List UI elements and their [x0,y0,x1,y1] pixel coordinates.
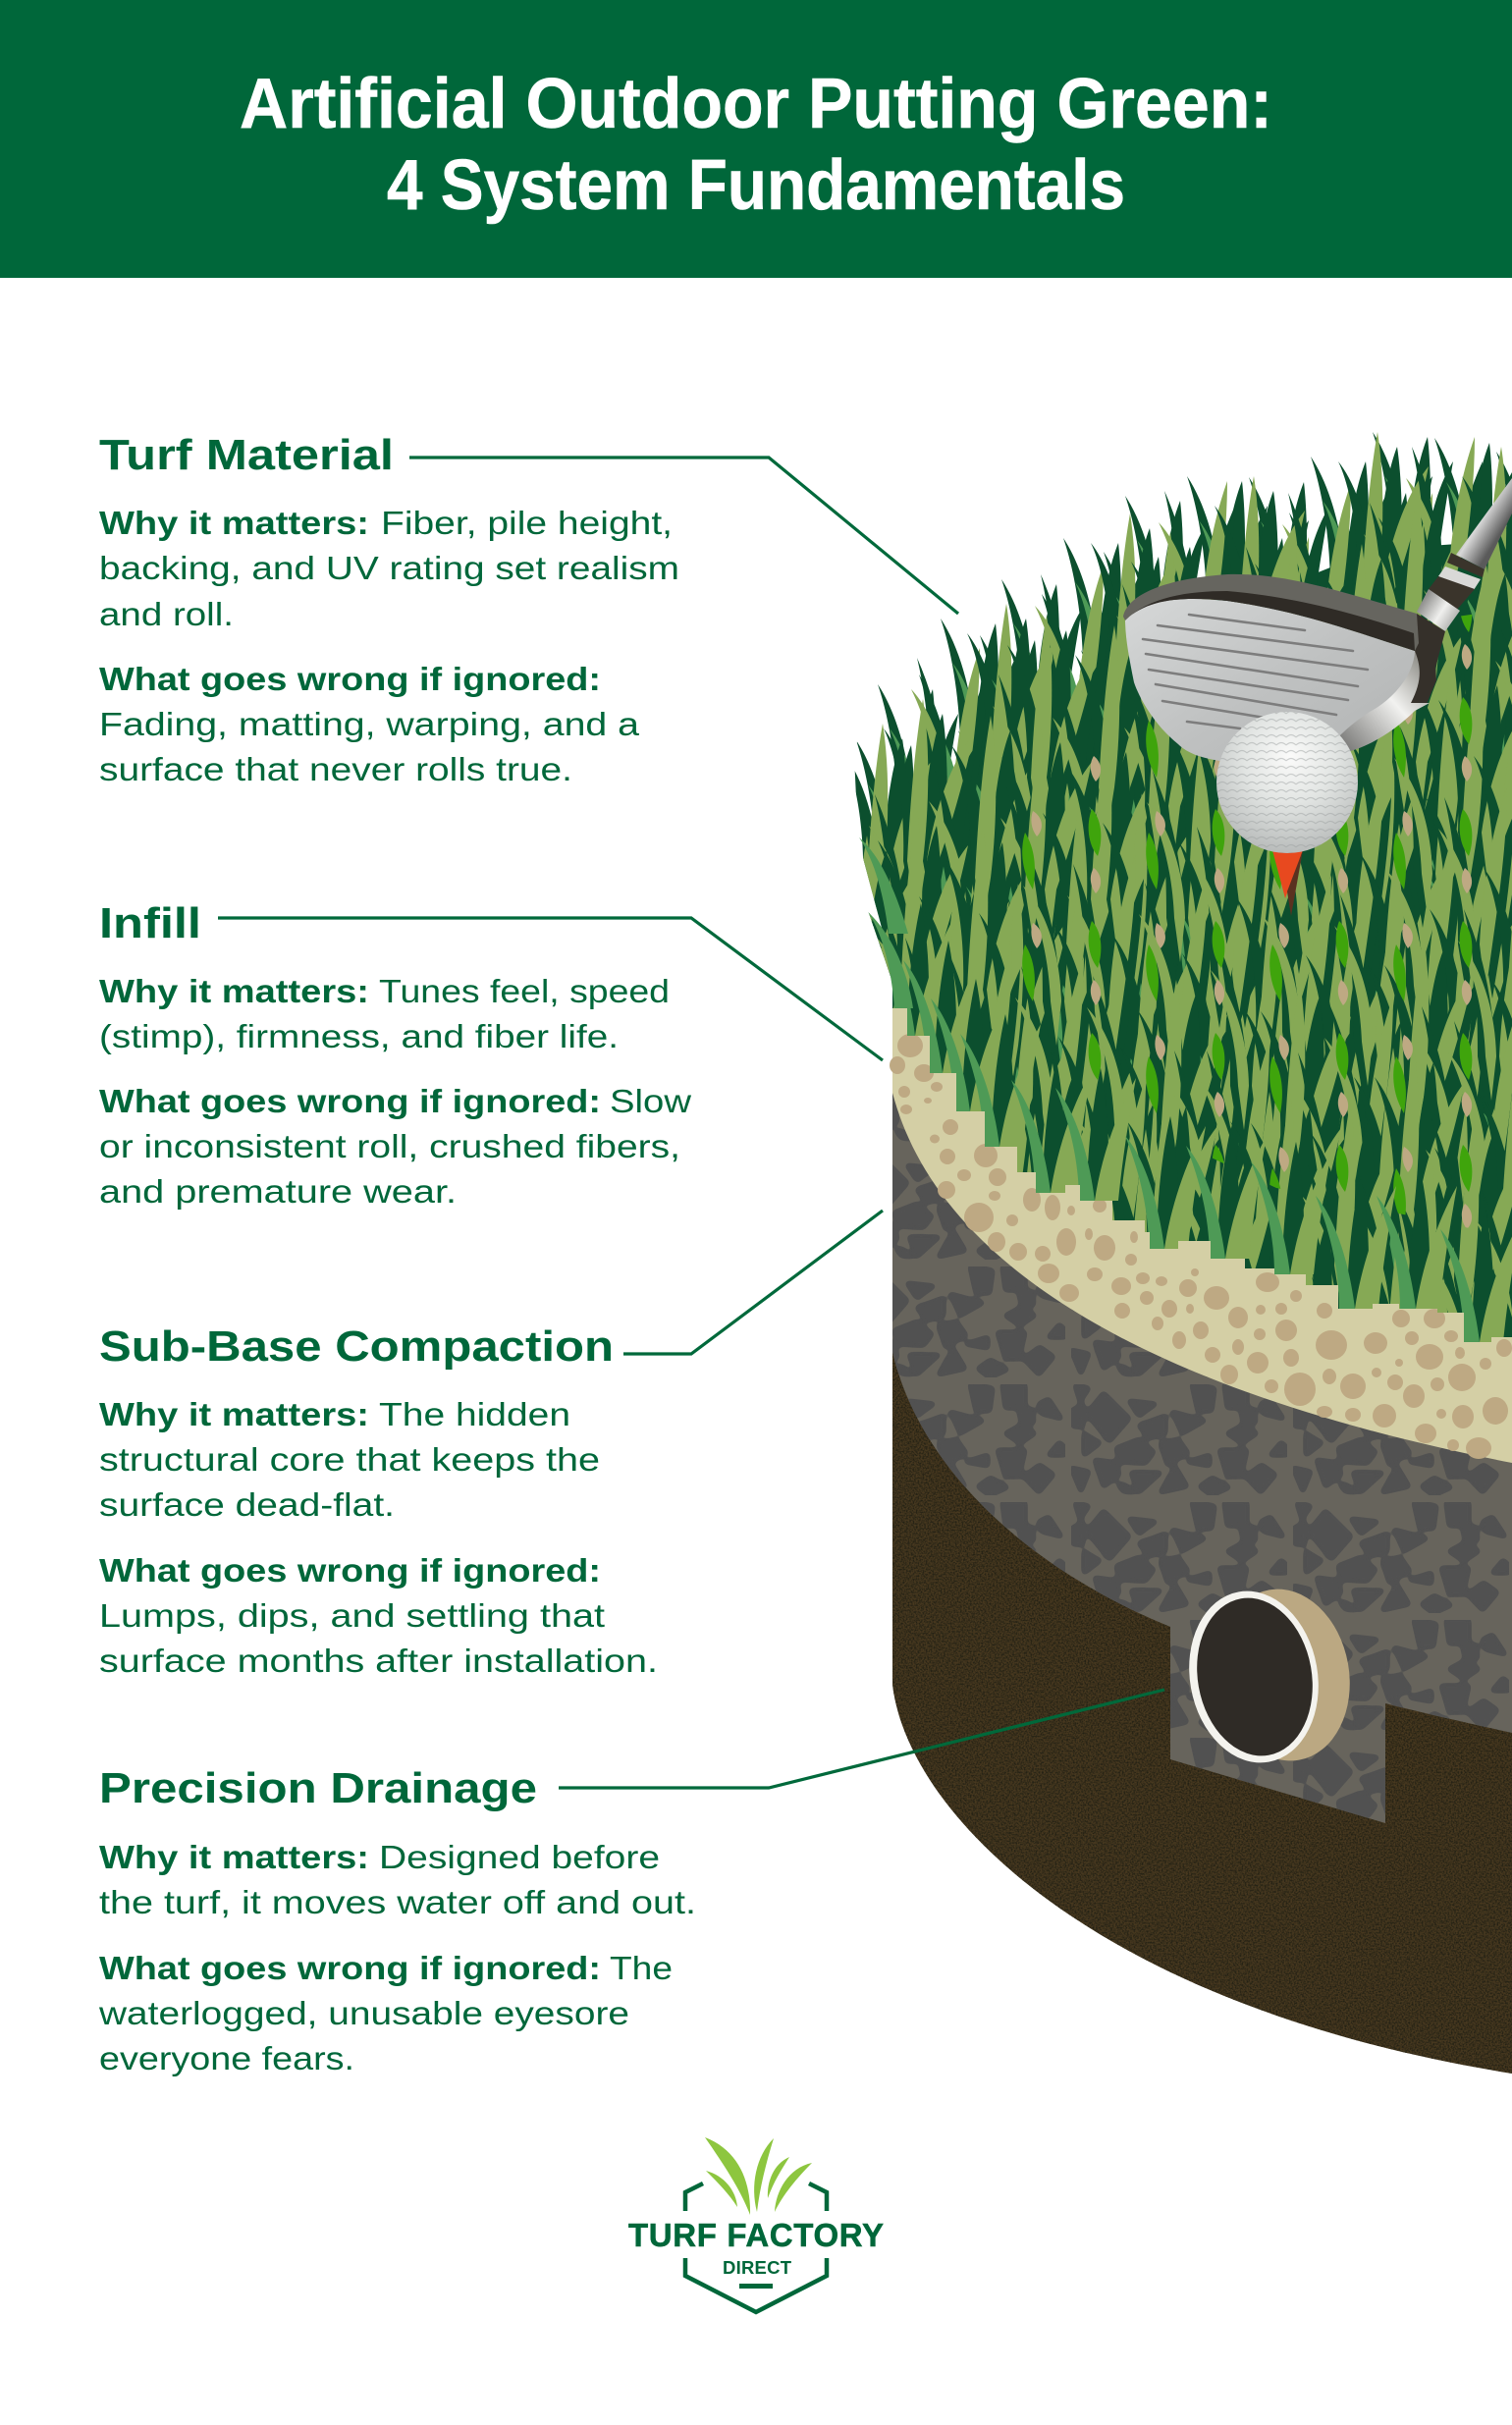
why it matters [99,505,679,632]
why it matters [99,1839,696,1920]
what goes wrong: surface months after installation. [99,1643,658,1679]
why it matters [99,973,670,1054]
logo hexagon frame [685,2183,827,2312]
heading: Sub-Base Compaction [99,1322,614,1371]
text block: sub-base compaction [99,1322,658,1679]
why it matters: Fiber, pile height, [381,505,673,541]
logo wordmark: TURF FACTORY [628,2217,884,2253]
callout line: turf material [409,458,958,614]
text block: infill [99,899,691,1210]
text block: turf material [99,431,679,787]
heading: Infill [99,899,201,947]
why it matters: The hidden [379,1396,570,1432]
what goes wrong [98,1950,673,2076]
why it matters: Why it matters: [99,1839,369,1875]
golf club [1123,478,1512,776]
logo subtitle: DIRECT [723,2257,792,2278]
heading: Precision Drainage [99,1764,537,1812]
what goes wrong [99,1083,691,1210]
what goes wrong: waterlogged, unusable eyesore [98,1995,629,2031]
illustration: soil cross-section with turf, club and ball [816,432,1512,2074]
golf ball [1216,712,1358,853]
header banner [0,0,1512,278]
why it matters: Why it matters: [99,973,369,1009]
turf: grass blades [854,432,1512,1342]
what goes wrong: The [610,1950,673,1986]
tee [1272,850,1303,916]
what goes wrong: What goes wrong if ignored: [99,1083,601,1119]
text block: precision drainage [98,1764,696,2076]
what goes wrong: surface that never rolls true. [99,751,572,787]
logo: Turf Factory Direct [628,2137,884,2312]
title: Artificial Outdoor Putting Green: [240,65,1272,143]
what goes wrong: everyone fears. [99,2040,354,2076]
what goes wrong: What goes wrong if ignored: [99,1950,601,1986]
what goes wrong: What goes wrong if ignored: [99,1552,601,1589]
layer: sub-base gravel [892,1080,1512,1823]
layer: infill sand with pebbles [890,1001,1512,1463]
what goes wrong: and premature wear. [99,1173,457,1210]
why it matters: structural core that keeps the [99,1441,600,1478]
why it matters: and roll. [99,596,234,632]
layer: soil [892,1335,1512,2074]
heading: Turf Material [99,431,394,479]
why it matters: the turf, it moves water off and out. [99,1884,696,1920]
title: 4 System Fundamentals [387,146,1125,225]
callout line: infill [218,918,883,1060]
what goes wrong [99,661,640,787]
what goes wrong: Lumps, dips, and settling that [99,1597,605,1634]
why it matters: (stimp), firmness, and fiber life. [99,1018,619,1054]
what goes wrong: or inconsistent roll, crushed fibers, [99,1128,680,1164]
what goes wrong: What goes wrong if ignored: [99,661,601,697]
title [240,65,1272,225]
why it matters: Tunes feel, speed [379,973,670,1009]
why it matters [99,1396,600,1523]
why it matters: Designed before [379,1839,660,1875]
why it matters: backing, and UV rating set realism [99,550,679,586]
callout line: sub-base compaction [623,1211,883,1354]
why it matters: Why it matters: [99,1396,369,1432]
what goes wrong: Fading, matting, warping, and a [99,706,640,742]
callout line: precision drainage [559,1690,1164,1788]
why it matters: Why it matters: [99,505,369,541]
logo grass blades [705,2137,812,2215]
what goes wrong: Slow [610,1083,691,1119]
drainage pipe [1176,1579,1363,1773]
club head [1394,614,1445,704]
club shaft [1417,478,1512,631]
why it matters: surface dead-flat. [99,1486,395,1523]
what goes wrong [99,1552,658,1679]
